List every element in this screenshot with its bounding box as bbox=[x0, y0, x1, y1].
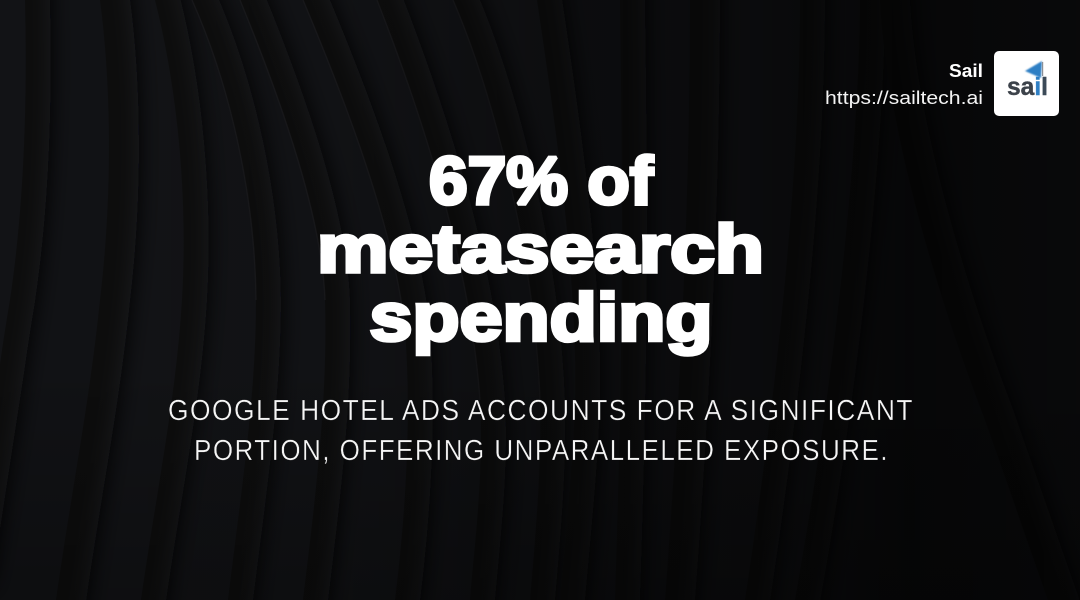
brand url: https://sailtech.ai bbox=[825, 88, 983, 108]
title: 67% of bbox=[429, 143, 653, 219]
brand block bbox=[825, 51, 1059, 116]
subtitle bbox=[168, 395, 914, 467]
brand name: Sail bbox=[949, 61, 983, 81]
title: metasearch bbox=[317, 211, 764, 287]
subtitle: PORTION, OFFERING UNPARALLELED EXPOSURE. bbox=[194, 435, 889, 467]
icon: sail logo bbox=[994, 51, 1059, 116]
subtitle: GOOGLE HOTEL ADS ACCOUNTS FOR A SIGNIFICANT bbox=[168, 395, 914, 427]
title bbox=[317, 143, 764, 356]
icon: sail logo: sail bbox=[1007, 73, 1048, 101]
title: spending bbox=[370, 280, 712, 356]
